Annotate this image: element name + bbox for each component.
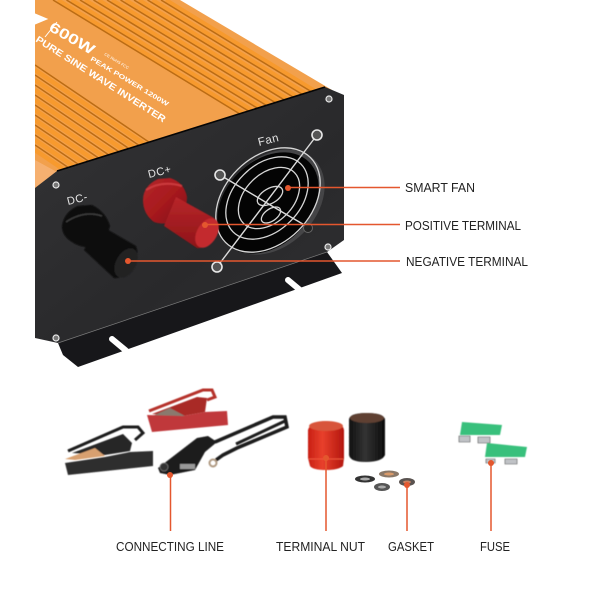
panel: orange inverter housing	[35, 0, 332, 188]
callout: terminal nut: TERMINAL NUT	[276, 539, 365, 554]
callout: fuse: FUSE	[480, 539, 510, 554]
lower heat-sink ribs	[35, 64, 149, 170]
callout: negative terminal	[125, 255, 528, 269]
icon: logo slash	[35, 14, 57, 37]
icon: red clamp	[147, 390, 228, 432]
callout: terminal nut	[276, 455, 365, 554]
icon: black clamp	[65, 427, 153, 475]
icon: red positive terminal	[143, 178, 224, 252]
text: wattage: 600W	[46, 20, 98, 59]
panel: black front plate and mounting flange	[35, 87, 344, 367]
text: sine wave inverter: PURE SINE WAVE INVERTER	[33, 34, 168, 125]
icon: terminal nuts	[308, 413, 385, 470]
upper heat-sink ribs	[52, 0, 316, 114]
callout: smart fan	[285, 181, 475, 195]
icon: fan grill	[195, 127, 346, 276]
label: Fan: Fan	[257, 132, 280, 149]
callout: negative terminal: NEGATIVE TERMINAL	[406, 255, 528, 269]
text: peak power: PEAK POWER 1200W	[89, 56, 171, 109]
callout: gasket: GASKET	[388, 539, 434, 554]
label: DC+: DC+	[147, 164, 173, 181]
callout: positive terminal	[202, 219, 521, 233]
callout: positive terminal: POSITIVE TERMINAL	[405, 219, 521, 233]
icon: fuses	[459, 422, 527, 464]
text: product name on housing	[33, 14, 171, 125]
icon: black negative terminal	[62, 205, 143, 282]
label: DC-: DC-	[66, 191, 89, 208]
callout: smart fan: SMART FAN	[405, 181, 475, 195]
icon: plate screws	[53, 96, 332, 341]
callout: gasket	[388, 482, 434, 554]
callout: connecting line	[116, 472, 224, 554]
icon: cigarette lighter plug and cable	[158, 417, 287, 475]
callout: connecting line: CONNECTING LINE	[116, 539, 224, 554]
text: certification marks: CE RoHS FCC	[103, 52, 130, 70]
callout: fuse	[480, 460, 510, 554]
icon: gaskets	[355, 470, 415, 491]
